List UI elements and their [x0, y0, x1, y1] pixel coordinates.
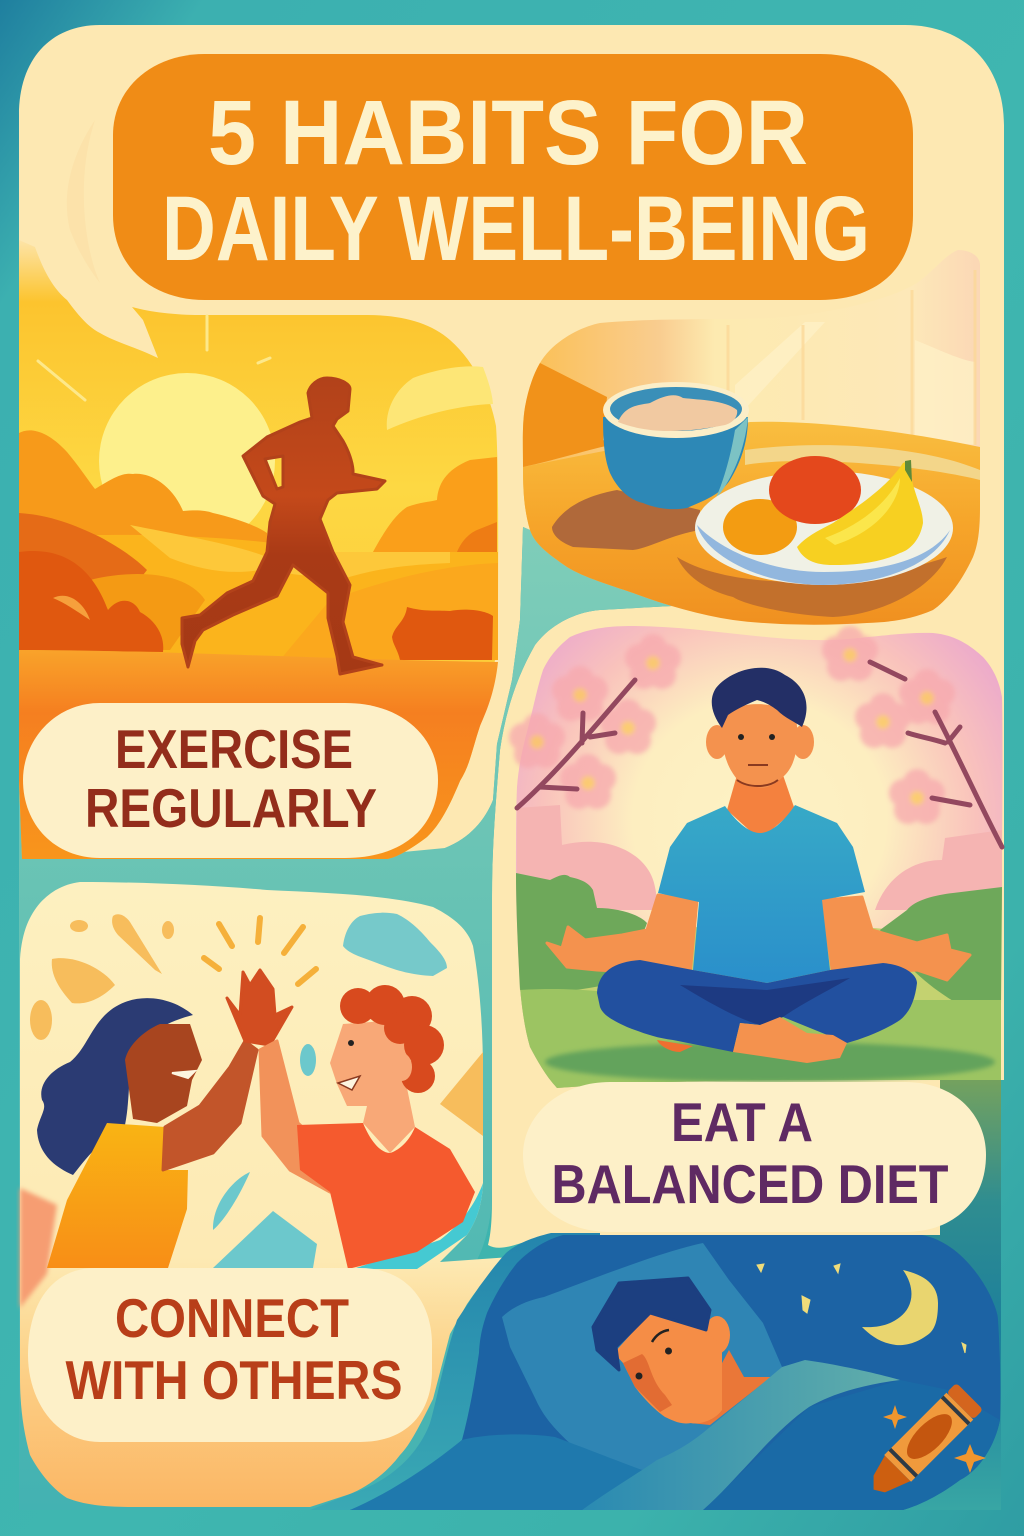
eye: [348, 1040, 354, 1046]
table far light band: [745, 445, 980, 480]
under foot: [657, 1040, 693, 1052]
label: connect with others: CONNECT: [115, 1287, 349, 1349]
bush right: [392, 607, 493, 660]
confetti: [30, 914, 483, 1136]
running scene: [19, 240, 498, 859]
outer band: [310, 1233, 600, 1510]
person meditating: [547, 668, 970, 1063]
mouth: [737, 765, 778, 786]
banana: [797, 460, 923, 565]
lawn front: [520, 987, 1001, 1088]
bushes left: [516, 873, 647, 992]
hills left: [19, 430, 267, 580]
stars: [757, 1264, 966, 1353]
hand: [227, 970, 292, 1045]
right arm: [822, 897, 970, 980]
label: exercise regularly: [23, 703, 438, 858]
label: exercise regularly: REGULARLY: [85, 777, 377, 839]
left arm: [547, 895, 697, 975]
smile: [172, 1071, 195, 1078]
field light band: [130, 525, 450, 580]
teal channel: [19, 527, 672, 1510]
pink shrub right: [875, 830, 1002, 910]
cream panel: [19, 25, 1004, 1248]
table shadow: [552, 490, 700, 550]
window frames: [728, 270, 975, 445]
brow: [652, 1330, 669, 1342]
legs: [597, 960, 917, 1052]
shirt: [297, 1123, 475, 1269]
pillow: [502, 1243, 782, 1470]
hair: [593, 1278, 710, 1370]
face: [125, 1024, 202, 1123]
orange fruit: [723, 499, 797, 555]
sun: [99, 373, 275, 549]
ear: [704, 1316, 730, 1354]
face shadow: [623, 1354, 672, 1412]
shirt: [47, 1123, 188, 1268]
arm: [260, 1041, 330, 1192]
salmon wash: [20, 1188, 57, 1308]
eyes: [738, 734, 744, 740]
neck and head: [330, 1020, 415, 1153]
hair: [340, 985, 444, 1093]
connect scene: [20, 913, 483, 1442]
title banner: DAILY WELL-BEING: [162, 178, 870, 280]
left blanket: [350, 1434, 642, 1510]
mid hill: [90, 574, 205, 650]
clap rays: [204, 918, 316, 984]
icon: crayon: [862, 1383, 983, 1504]
dark hill: [19, 513, 147, 640]
panel: exercise regularly: [19, 240, 498, 859]
feet: [733, 1017, 847, 1063]
cloud: [387, 366, 493, 430]
table: [523, 422, 980, 625]
bowl: [603, 382, 749, 509]
panel: sleep: [310, 1233, 1000, 1510]
night sky: [350, 1235, 1000, 1510]
label: eat a balanced diet: [523, 1082, 986, 1232]
label: connect with others: [28, 1268, 432, 1442]
ground: [19, 650, 498, 859]
pink shrub left: [517, 805, 657, 910]
red fruit: [769, 456, 861, 524]
lap shadow: [680, 978, 850, 1025]
sky: [19, 240, 498, 859]
right column wash: [880, 1070, 1001, 1510]
label: exercise regularly: EXERCISE: [115, 718, 353, 780]
ear: [392, 1053, 412, 1081]
hair: [712, 668, 807, 728]
runner: [182, 378, 385, 674]
cyan shapes: [213, 1044, 317, 1268]
face: [721, 704, 797, 788]
man: [260, 985, 475, 1269]
cloud: [343, 913, 447, 976]
shirt: [658, 805, 865, 983]
plate shadow: [677, 557, 947, 617]
window light: [735, 322, 975, 445]
icon: sparkles: [883, 1405, 986, 1473]
neck: [690, 1350, 771, 1425]
banner swoosh: [67, 120, 100, 283]
connect panel backdrop: [20, 882, 510, 1507]
bush left: [19, 551, 163, 652]
bushes right: [880, 887, 1002, 1005]
room wall: [523, 250, 980, 625]
right blanket: [703, 1380, 1000, 1510]
face: [614, 1313, 722, 1423]
label: eat a balanced diet: EAT A: [671, 1091, 813, 1153]
panel: meditation: [509, 626, 1003, 1088]
eyes: [636, 1348, 672, 1380]
field: [19, 535, 498, 660]
neck: [727, 775, 795, 840]
hill far right: [457, 522, 497, 554]
title banner: [113, 54, 913, 300]
lawn: [520, 925, 1001, 1088]
rays: [38, 316, 270, 400]
cyan edge: [353, 1183, 483, 1269]
field rise: [280, 563, 498, 660]
hills right: [373, 457, 497, 554]
ears: [706, 725, 728, 759]
ground shadow: [545, 1042, 995, 1082]
arm: [163, 1041, 257, 1170]
plate: [695, 456, 953, 585]
label: connect with others: WITH OTHERS: [66, 1349, 402, 1411]
light fleck: [53, 596, 90, 620]
blossoms: [509, 626, 955, 824]
panel: balanced diet food: [523, 250, 980, 625]
moon: [862, 1270, 938, 1345]
meditation backdrop: [516, 626, 1003, 1088]
label: eat a balanced diet: BALANCED DIET: [552, 1153, 948, 1215]
branches: [517, 662, 1002, 847]
mouth: [338, 1076, 360, 1090]
top blanket: [582, 1360, 900, 1510]
title banner: 5 HABITS FOR: [208, 82, 808, 184]
orange wall block: [523, 363, 610, 467]
woman: [37, 970, 292, 1268]
hair: [37, 998, 193, 1175]
